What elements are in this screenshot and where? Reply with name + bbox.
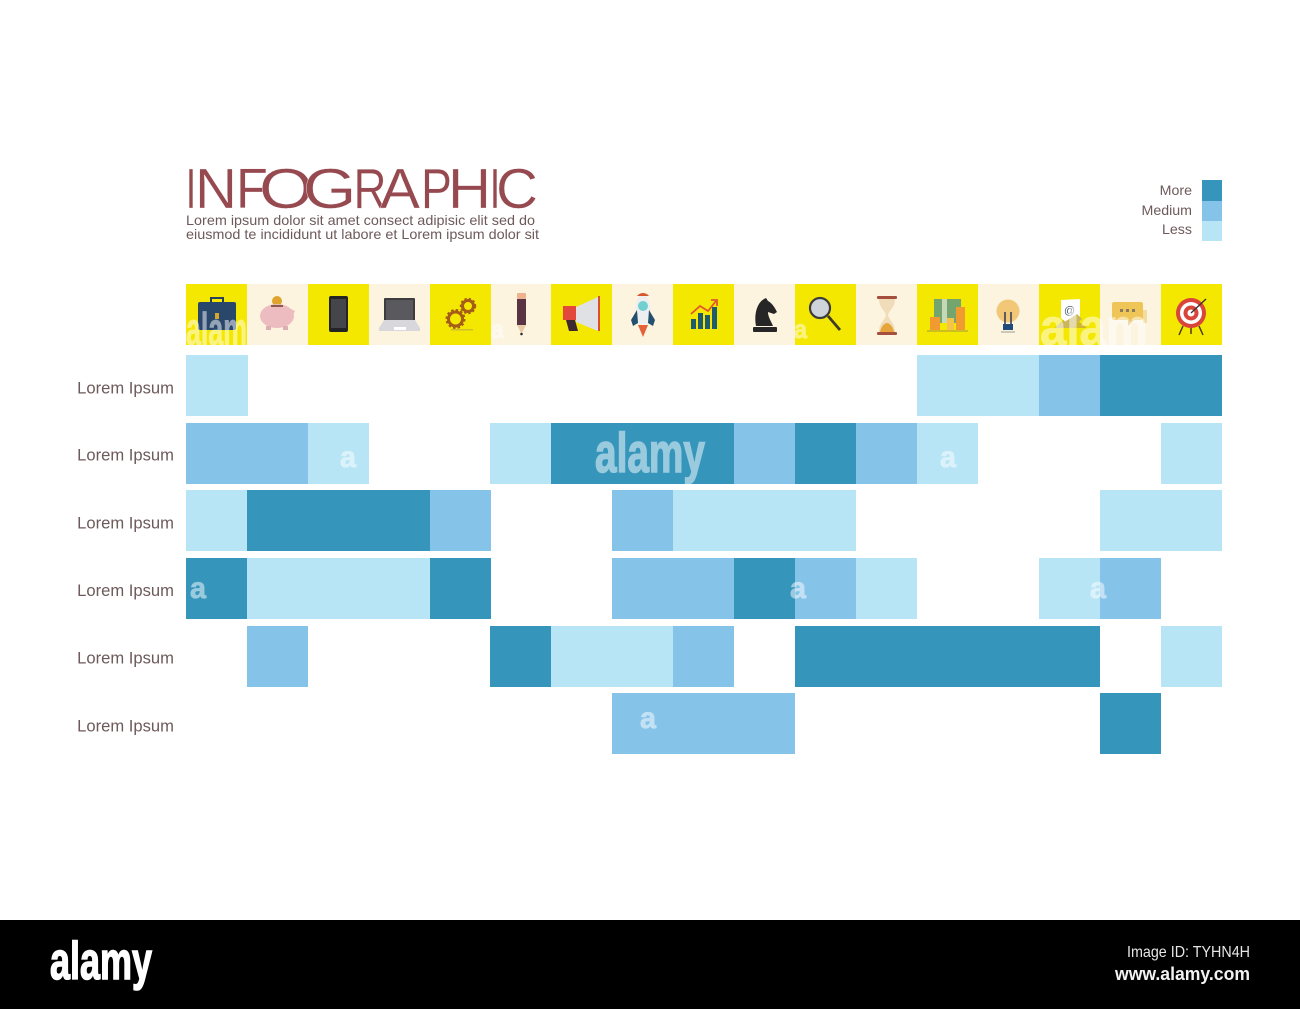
row 2 bars — [186, 423, 1222, 484]
watermark on chart: a — [940, 441, 956, 474]
legend — [1142, 180, 1222, 241]
row 6 bars — [612, 693, 1161, 754]
title: R — [354, 157, 386, 221]
icon: growth chart — [691, 300, 717, 329]
icon: email envelope — [1055, 299, 1087, 328]
footer website: www.alamy.com — [1114, 964, 1250, 984]
watermark on chart: a — [1090, 572, 1106, 605]
watermark on chart: a — [640, 702, 656, 735]
title: N — [195, 157, 237, 221]
row 3 bars — [186, 490, 1222, 551]
icon: megaphone — [563, 296, 600, 331]
row label: Lorem Ipsum 5: Lorem Ipsum — [77, 648, 174, 668]
icon: pencil — [517, 293, 526, 335]
row label: Lorem Ipsum 2: Lorem Ipsum — [77, 446, 174, 464]
legend: Less — [1162, 222, 1192, 238]
icon: briefcase — [198, 298, 236, 330]
footer band — [0, 920, 1300, 1009]
icon: rocket — [631, 292, 655, 337]
icon: magnifying glass — [810, 298, 840, 330]
description text: eiusmod te incididunt ut labore et Lorem ipsum dolor sit — [186, 226, 539, 242]
legend: More — [1160, 183, 1192, 199]
legend: Medium — [1142, 203, 1192, 219]
row 5 bars — [247, 626, 1222, 687]
watermark on chart: alamy — [595, 421, 705, 484]
title: C — [496, 157, 538, 221]
icon: chess knight — [753, 298, 777, 332]
row 4 bars — [186, 558, 1161, 619]
icon: smartphone — [329, 296, 348, 332]
description text: Lorem ipsum dolor sit amet consect adipisic elit sed do — [186, 212, 535, 228]
icon strip background — [186, 284, 1222, 345]
icon: money stacks — [927, 299, 968, 332]
icon: target — [1176, 298, 1206, 335]
watermark on chart: a — [790, 572, 806, 605]
title: F — [236, 157, 268, 221]
watermark on chart — [190, 421, 1106, 735]
title: H — [448, 157, 491, 221]
title: I — [490, 157, 500, 221]
watermark on chart: a — [340, 441, 356, 474]
row 1 bars — [186, 355, 1222, 416]
watermark on icon strip — [186, 299, 1148, 357]
title: I — [186, 157, 196, 221]
icon: light bulb — [996, 300, 1020, 333]
watermark on chart: a — [190, 572, 206, 605]
icon: hourglass — [877, 296, 897, 335]
icon: gears — [446, 299, 475, 330]
icon: chat bubbles — [1112, 302, 1147, 326]
watermark on icon strip: a — [491, 314, 504, 344]
icon: laptop — [379, 298, 420, 331]
footer logo: alamy — [50, 932, 152, 991]
title: P — [421, 157, 452, 221]
watermark on icon strip: alam — [1040, 299, 1148, 357]
icon: email envelope: @ — [1064, 305, 1075, 317]
row label: Lorem Ipsum 6: Lorem Ipsum — [77, 716, 174, 736]
row label: Lorem Ipsum 3: Lorem Ipsum — [77, 514, 174, 532]
description text — [186, 212, 539, 242]
icon: piggy bank — [260, 296, 295, 330]
footer image id: Image ID: TYHN4H — [1127, 944, 1250, 961]
title: A — [380, 157, 420, 221]
row label: Lorem Ipsum 4: Lorem Ipsum — [77, 581, 174, 600]
row label: Lorem Ipsum 1: Lorem Ipsum — [77, 378, 174, 398]
watermark on icon strip: a — [794, 314, 807, 344]
title: O — [259, 157, 314, 221]
title: G — [303, 157, 356, 221]
watermark on icon strip: alam — [186, 303, 247, 355]
